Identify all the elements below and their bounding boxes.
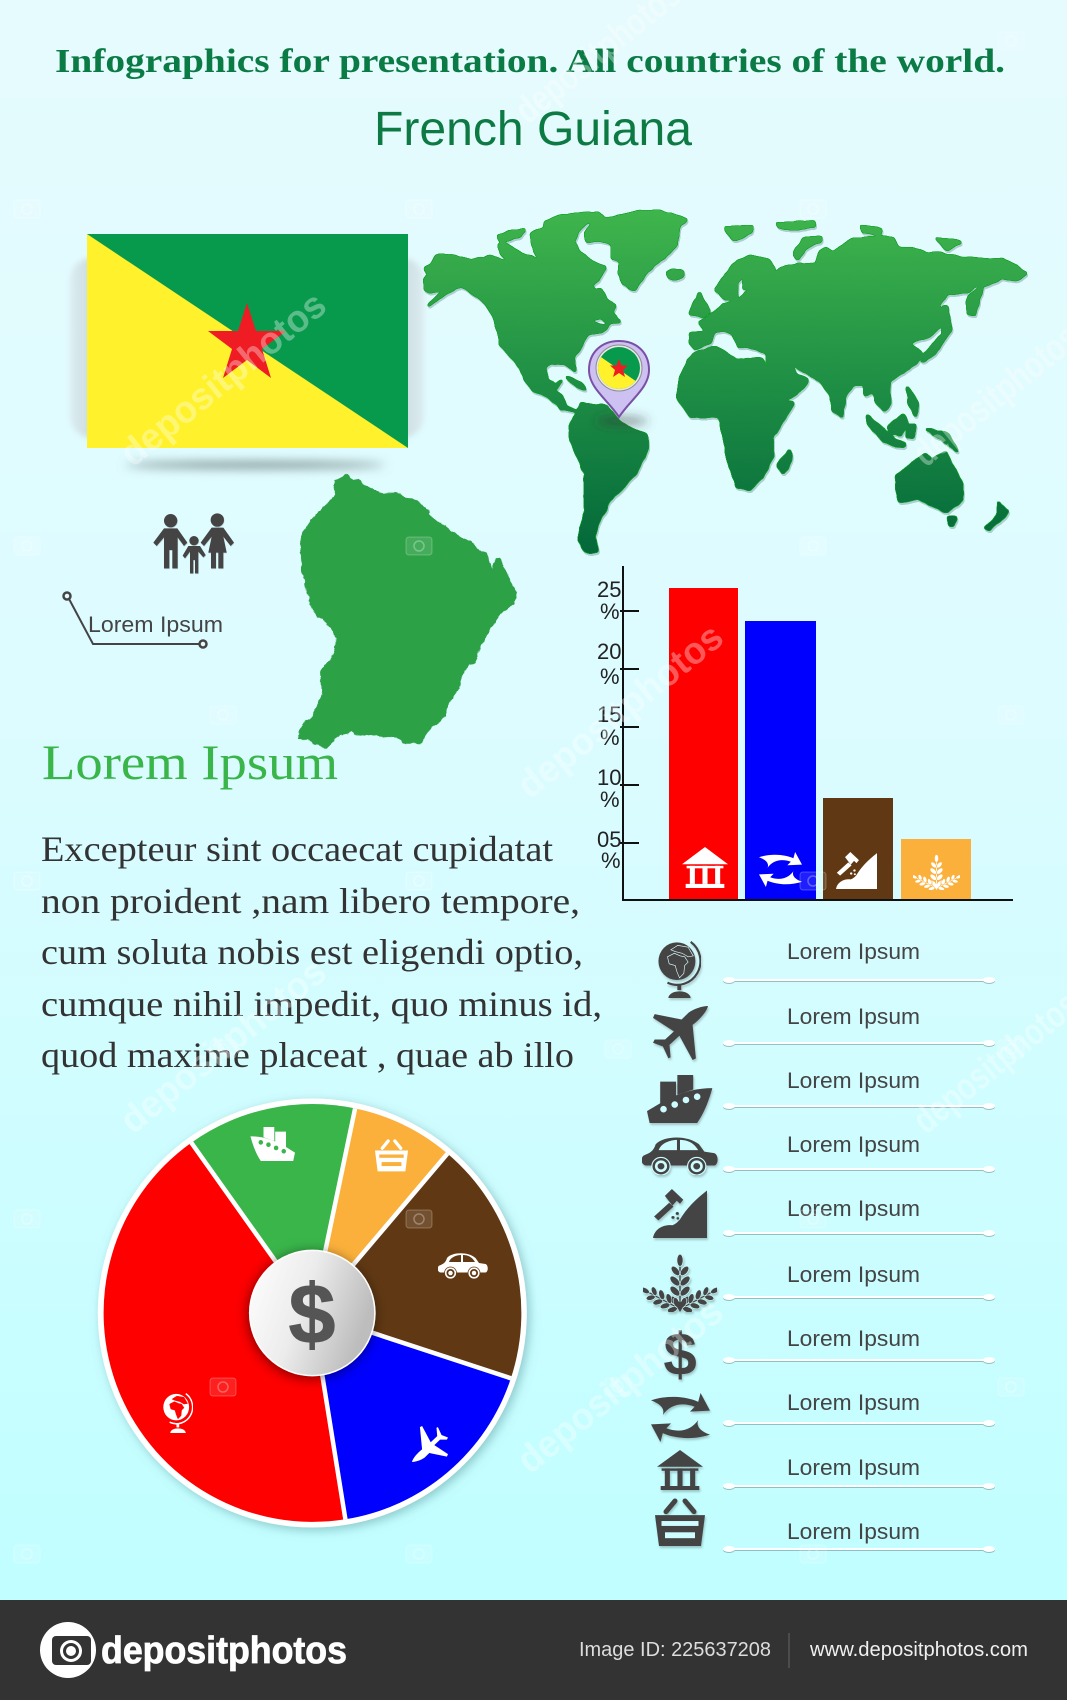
- axis labels: %: [600, 599, 620, 624]
- callout: population label: [64, 592, 223, 648]
- body paragraph: [41, 829, 602, 1075]
- country name: French Guiana: [374, 103, 692, 156]
- axis labels: %: [600, 787, 620, 812]
- icon: bank on red bar: [682, 847, 728, 888]
- slice: orange: [312, 1108, 448, 1313]
- bar: red: [669, 588, 738, 900]
- title: Infographics for presentation. All countries of the world.: [55, 43, 1005, 80]
- watermarks: depositphotos: [112, 284, 335, 475]
- bar: blue: [745, 621, 816, 900]
- axis labels: 20: [597, 639, 621, 664]
- body paragraph: cum soluta nobis est eligendi optio,: [41, 932, 583, 972]
- icon: mining on brown bar: [836, 852, 877, 889]
- footer image id: Image ID: 225637208: [579, 1639, 771, 1661]
- footer bar: [0, 1600, 1067, 1700]
- body paragraph: cumque nihil impedit, quo minus id,: [41, 984, 602, 1024]
- flag shadow ellipse: [125, 462, 385, 468]
- axis labels: 10: [597, 765, 621, 790]
- body paragraph: non proident ,nam libero tempore,: [41, 881, 580, 921]
- footer url: www.depositphotos.com: [809, 1639, 1028, 1661]
- row: dollar: [663, 1321, 995, 1388]
- slice: green: [191, 1104, 355, 1313]
- row: dollar: Lorem Ipsum: [787, 1326, 920, 1351]
- map of French Guiana: [297, 474, 516, 748]
- callout: population label: Lorem Ipsum: [88, 612, 223, 637]
- slice: blue: [312, 1313, 511, 1519]
- pie chart: [98, 1098, 527, 1528]
- row: arrows: [651, 1390, 995, 1442]
- row: plane: Lorem Ipsum: [787, 1004, 920, 1029]
- axis labels: 05: [597, 827, 621, 852]
- row: ship: Lorem Ipsum: [787, 1068, 920, 1093]
- row: bank: Lorem Ipsum: [787, 1455, 920, 1480]
- row: arrows: Lorem Ipsum: [787, 1390, 920, 1415]
- world map: [424, 212, 1026, 552]
- watermarks: depositphotos: [112, 951, 335, 1142]
- row: basket: Lorem Ipsum: [787, 1519, 920, 1544]
- icon: arrows on blue bar: [759, 852, 802, 887]
- row: globe: [658, 939, 995, 998]
- axis labels: %: [600, 725, 620, 750]
- axis labels: [597, 577, 621, 873]
- watermarks: depositphotos: [509, 1291, 732, 1482]
- watermarks: depositphotos: [509, 616, 732, 807]
- row: globe: Lorem Ipsum: [787, 939, 920, 964]
- bar chart: [597, 566, 1013, 900]
- axis labels: 25: [597, 577, 621, 602]
- bar: brown: [823, 798, 893, 900]
- body paragraph: quod maxime placeat , quae ab illo: [41, 1035, 574, 1075]
- watermarks: [112, 0, 1067, 1482]
- icon: family: [153, 513, 234, 573]
- icon: car on brown slice: [438, 1253, 488, 1279]
- icon list rows: [636, 939, 995, 1552]
- row: wheat: Lorem Ipsum: [787, 1262, 920, 1287]
- icon: plane on blue slice: [412, 1426, 448, 1462]
- row: ship: [647, 1068, 995, 1123]
- slice: brown: [312, 1154, 521, 1378]
- row: wheat: [636, 1254, 995, 1318]
- map location pin: [589, 341, 649, 426]
- axis labels: 15: [597, 702, 621, 727]
- footer logo wordmark: depositphotos: [101, 1630, 347, 1672]
- heading: Lorem Ipsum: [42, 734, 338, 790]
- row: mining: [653, 1189, 995, 1238]
- center disc with dollar: [250, 1250, 375, 1376]
- icon: basket on orange slice: [375, 1141, 408, 1171]
- flag shadow panel: [70, 258, 424, 438]
- icon: globe on red slice: [163, 1394, 193, 1433]
- center disc with dollar: $: [289, 1267, 335, 1361]
- footer logo icon: [40, 1622, 96, 1678]
- row: car: Lorem Ipsum: [787, 1132, 920, 1157]
- flag of French Guiana: [87, 234, 408, 448]
- row: basket: [655, 1501, 995, 1552]
- row: mining: Lorem Ipsum: [787, 1196, 920, 1221]
- icon: wheat on orange bar: [908, 855, 965, 893]
- row: car: [642, 1132, 995, 1175]
- slice: red: [104, 1143, 345, 1522]
- bar: orange: [901, 839, 971, 900]
- axis labels: %: [601, 848, 621, 873]
- icon: ship on green slice: [250, 1127, 295, 1161]
- row: dollar: $: [663, 1321, 697, 1388]
- row: bank: [657, 1450, 995, 1490]
- body paragraph: Excepteur sint occaecat cupidatat: [41, 829, 553, 869]
- row: plane: [653, 1004, 995, 1060]
- axis labels: %: [600, 664, 620, 689]
